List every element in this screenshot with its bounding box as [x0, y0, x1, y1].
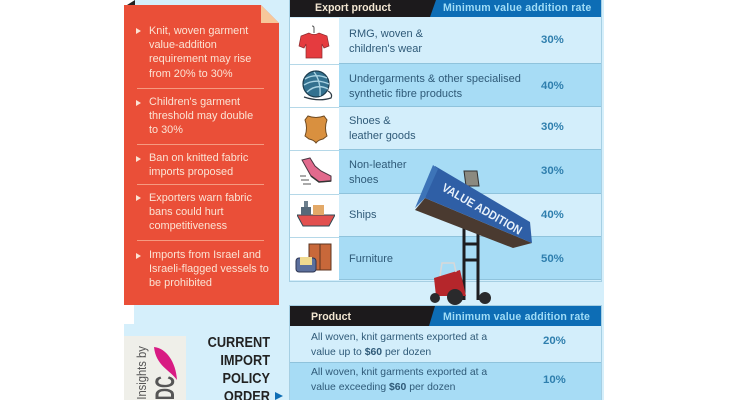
table: export product: [290, 0, 601, 281]
bullet 4: bans could hurt: [149, 206, 223, 218]
row text: RMG: RMG, woven &: [349, 28, 423, 40]
rate: ships: 40%: [541, 209, 564, 221]
logo feather: [154, 347, 177, 380]
background panel lower left extension: [124, 324, 136, 400]
background panel: [134, 0, 604, 400]
row text: shoes: leather goods: [349, 130, 416, 142]
logo text: DC: DC: [150, 375, 180, 400]
row text: exceeding $60: [311, 367, 488, 393]
bullet 2: Children's garment: [149, 96, 240, 108]
icon: sneaker: [300, 157, 332, 184]
header label: product: Product: [311, 311, 351, 323]
logo text: insights by: Insights by: [134, 346, 149, 399]
row 3 background: [290, 107, 601, 150]
forklift cab: [440, 263, 456, 276]
icon: pointer arrow: [275, 392, 283, 400]
container label: VALUE ADDITION: [440, 180, 524, 238]
row text: undergarments: Undergarments & other specialised: [349, 73, 521, 85]
header label: rate: Minimum value addition rate: [443, 2, 591, 14]
bullet 4: [136, 192, 252, 232]
bullet 3: Ban on knitted fabric: [149, 152, 248, 164]
row text: ships: Ships: [349, 209, 377, 221]
row 2 background: [290, 64, 601, 107]
bullet 5: Imports from Israel and: [149, 249, 261, 261]
row text: exceeding $60: value exceeding $60 per dozen: [311, 382, 455, 393]
row text: non-leather shoes: [349, 159, 406, 186]
bullet 3: [136, 152, 248, 178]
row text: furniture: Furniture: [349, 253, 393, 265]
corner cut of red panel: [261, 5, 279, 23]
spreader: [464, 171, 479, 186]
header: product: [290, 306, 601, 326]
row text: up to $60: [311, 332, 488, 358]
row 2 background: [290, 362, 601, 400]
bullet 4: Exporters warn fabric: [149, 192, 252, 204]
header label: export product: Export product: [315, 2, 391, 14]
icon: shirt: [298, 26, 330, 58]
container underside: [415, 198, 532, 248]
icon: dark corner mark: [127, 0, 135, 5]
header label: rate: Minimum value addition rate: [443, 311, 590, 323]
header blue segment: [429, 306, 601, 326]
rate: furniture: 50%: [541, 253, 564, 265]
icon cell column: [290, 18, 339, 280]
row text: up to $60: All woven, knit garments exported at a: [311, 332, 487, 343]
row 5 background: [290, 194, 601, 237]
rate: undergarments: 40%: [541, 80, 564, 92]
icon: leather hide: [304, 115, 328, 144]
bullet 5: Israeli-flagged vessels to: [149, 263, 269, 275]
icon: cargo ship: [297, 201, 335, 226]
row 4 background: [290, 150, 601, 194]
bullet 4: competitiveness: [149, 220, 227, 232]
row text: RMG: children's wear: [349, 43, 422, 55]
icon: yarn ball: [302, 70, 332, 100]
heading: current import policy order: [208, 335, 270, 400]
rate: shoes: 30%: [541, 121, 564, 133]
forklift wheels: [430, 289, 491, 305]
bullet 2: to 30%: [149, 124, 183, 136]
bullet 1: Knit, woven garment: [149, 25, 248, 37]
header: export product: [290, 0, 601, 17]
icon: folded corner: [261, 5, 279, 23]
row text: undergarments: [349, 73, 521, 100]
heading: current import policy order: IMPORT: [220, 353, 270, 369]
table: import policy: [290, 306, 601, 400]
panel: key proposals: [124, 5, 279, 305]
row 6 background: [290, 237, 601, 280]
bullet 2: threshold may double: [149, 110, 253, 122]
row text: shoes: Shoes &: [349, 115, 391, 127]
bullet 5: [136, 249, 269, 289]
icon: furniture: [296, 244, 332, 272]
illustration: container handler: [415, 165, 532, 305]
heading: current import policy order: CURRENT: [208, 335, 270, 351]
bullet 1: from 20% to 30%: [149, 68, 233, 80]
forklift body: [434, 270, 466, 296]
container long face: [425, 166, 532, 243]
bullet 2: [136, 96, 253, 136]
bullet 3: imports proposed: [149, 166, 233, 178]
bullet 1: value-addition: [149, 39, 217, 51]
row text: non-leather shoes: shoes: [349, 174, 378, 186]
container end face: [415, 165, 438, 208]
bullet 1: requirement may rise: [149, 53, 251, 65]
rate: non-leather shoes: 30%: [541, 165, 564, 177]
row text: exceeding $60: All woven, knit garments exported at a: [311, 367, 487, 378]
row text: non-leather shoes: Non-leather: [349, 159, 406, 171]
mast: [464, 228, 478, 300]
logo panel: insights by PDC: [124, 336, 186, 400]
row text: up to $60: value up to $60 per dozen: [311, 347, 431, 358]
rate: RMG: 30%: [541, 34, 564, 46]
rate: 10%: 10%: [543, 374, 566, 386]
header blue segment: [430, 0, 601, 17]
row text: shoes: [349, 115, 416, 142]
heading: current import policy order: POLICY: [222, 371, 270, 387]
row text: RMG: [349, 28, 423, 55]
row text: undergarments: synthetic fibre products: [349, 88, 462, 100]
bullet 5: be prohibited: [149, 277, 212, 289]
rate: 20%: 20%: [543, 335, 566, 347]
bullet 1: [136, 25, 251, 80]
row 1 background: [290, 18, 601, 64]
